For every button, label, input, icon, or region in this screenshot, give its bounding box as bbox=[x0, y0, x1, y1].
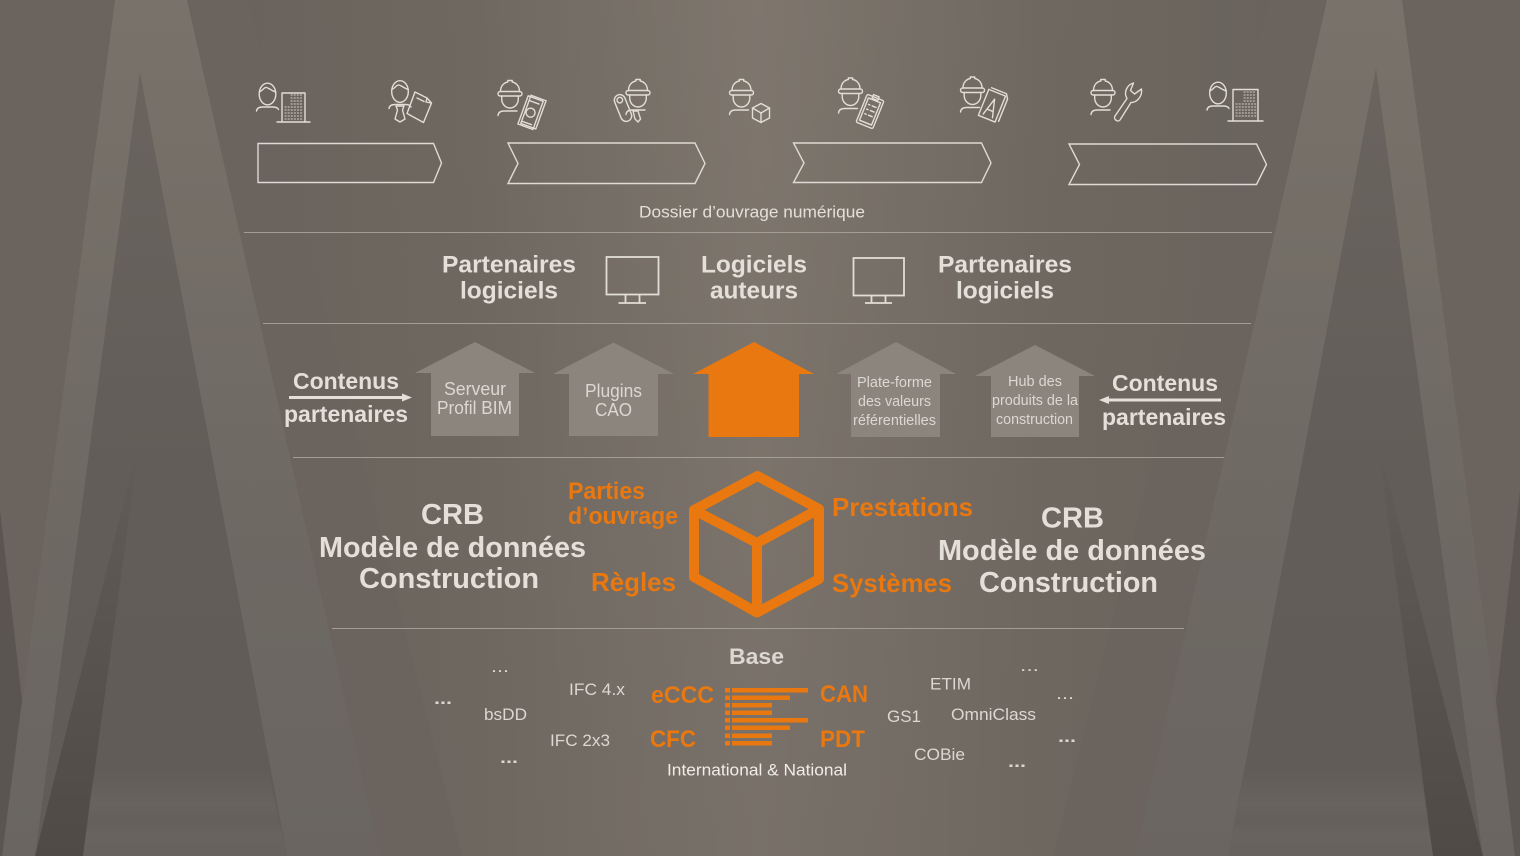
icon: owner with building bbox=[1207, 82, 1263, 121]
house: reference values platform: référentielles bbox=[853, 412, 936, 429]
house: reference values platform: Plate-forme bbox=[857, 374, 932, 391]
house: orange centre bbox=[693, 342, 814, 437]
text: orange classifications: CFC bbox=[650, 726, 696, 753]
row: software bbox=[442, 252, 1072, 304]
text: standards right: ... bbox=[1058, 727, 1076, 746]
icon: engineer with plan roll bbox=[613, 80, 650, 123]
text: standards left: ... bbox=[434, 689, 452, 708]
row: CRB data model bbox=[319, 476, 1206, 612]
house: construction products hub bbox=[975, 345, 1095, 437]
text: orange classifications: PDT bbox=[820, 726, 865, 753]
text: standards left: ... bbox=[500, 748, 518, 767]
chevron 3 bbox=[794, 143, 991, 182]
text: standards right: ETIM bbox=[930, 674, 971, 694]
text: CRB data model right: CRB bbox=[1041, 502, 1104, 534]
chevron 1 bbox=[258, 144, 442, 182]
house: construction products hub: Hub des bbox=[1008, 373, 1062, 390]
icon: orange cube bbox=[694, 476, 819, 612]
icon: manager with document bbox=[389, 81, 432, 122]
text: standards left bbox=[434, 657, 625, 767]
icon: monitor left bbox=[606, 257, 658, 303]
text and arrow: partner contents left: Contenus bbox=[293, 368, 399, 394]
text and arrow: partner contents right: Contenus bbox=[1112, 370, 1218, 396]
icon: worker with clipboard bbox=[838, 78, 885, 129]
text: CRB data model right: Modèle de données bbox=[938, 535, 1206, 567]
text: partner software left: Partenaires bbox=[442, 252, 576, 278]
house: BIM profile server bbox=[415, 342, 535, 436]
row: process icons bbox=[256, 77, 1263, 130]
text: authoring software: auteurs bbox=[710, 278, 798, 304]
text and arrow: partner contents left: partenaires bbox=[284, 401, 408, 427]
text: orange classifications bbox=[650, 681, 868, 753]
text: standards right: ... bbox=[1008, 752, 1026, 771]
text: standards left: bsDD bbox=[484, 705, 527, 724]
text: systems: Systèmes bbox=[832, 568, 952, 598]
section dividers bbox=[244, 232, 1272, 628]
icon: orange list bars bbox=[725, 688, 808, 746]
house: BIM profile server: Serveur bbox=[444, 379, 506, 399]
heading: base: Base bbox=[729, 644, 784, 669]
text: standards right: COBie bbox=[914, 745, 965, 764]
icon: client with building bbox=[256, 83, 310, 122]
text and arrow: partner contents right bbox=[1099, 370, 1226, 430]
text: owners: d’ouvrage bbox=[568, 503, 678, 530]
text: orange classifications: CAN bbox=[820, 681, 868, 708]
row: process chevrons bbox=[258, 143, 1266, 184]
text: partner software right: Partenaires bbox=[938, 252, 1072, 278]
text and arrow: partner contents right: partenaires bbox=[1102, 404, 1226, 430]
house: BIM profile server: Profil BIM bbox=[437, 398, 512, 418]
icon: worker with banknotes bbox=[498, 80, 546, 130]
house: CAD plugins bbox=[553, 342, 674, 436]
text: CRB data model left: Construction bbox=[359, 563, 539, 595]
text: rules: Règles bbox=[591, 567, 676, 597]
text: partner software right: logiciels bbox=[956, 278, 1054, 304]
row: houses and partner contents bbox=[284, 342, 1226, 437]
house: CAD plugins: CAO bbox=[595, 400, 632, 420]
text: standards right: ... bbox=[1020, 656, 1039, 675]
house: construction products hub: produits de la bbox=[992, 392, 1079, 409]
house: construction products hub: construction bbox=[996, 411, 1073, 428]
icon: worker with permit plans bbox=[960, 77, 1009, 123]
text: authoring software: Logiciels bbox=[701, 252, 807, 278]
text: standards right bbox=[887, 656, 1076, 771]
chevron 2 bbox=[508, 143, 705, 184]
text: standards left: ... bbox=[491, 657, 509, 676]
icon: worker with wrench bbox=[1091, 80, 1142, 121]
text: standards right: OmniClass bbox=[951, 705, 1036, 724]
text: international and national: International & National bbox=[667, 760, 847, 780]
text and arrow: partner contents left bbox=[284, 368, 412, 427]
text: CRB data model left: CRB bbox=[421, 499, 484, 531]
text: standards left: IFC 2x3 bbox=[550, 731, 610, 750]
text: standards left: IFC 4.x bbox=[569, 680, 625, 699]
text: CRB data model left: Modèle de données bbox=[319, 532, 586, 564]
text: standards right: GS1 bbox=[887, 707, 921, 726]
row: base standards bbox=[434, 644, 1076, 780]
text: CRB data model right: Construction bbox=[979, 567, 1158, 599]
text: services: Prestations bbox=[832, 492, 973, 522]
house: reference values platform bbox=[836, 342, 956, 437]
text: partner software left: logiciels bbox=[460, 278, 558, 304]
text: orange classifications: eCCC bbox=[651, 682, 714, 709]
caption: digital project file: Dossier d’ouvrage numérique bbox=[639, 202, 865, 222]
chevron 4 bbox=[1069, 144, 1266, 184]
icon: worker with cube bbox=[730, 80, 770, 122]
text: standards right: ... bbox=[1056, 684, 1074, 703]
icon: monitor right bbox=[854, 258, 904, 303]
text: owners: Parties bbox=[568, 478, 645, 505]
house: CAD plugins: Plugins bbox=[585, 381, 642, 401]
house: reference values platform: des valeurs bbox=[858, 393, 931, 410]
